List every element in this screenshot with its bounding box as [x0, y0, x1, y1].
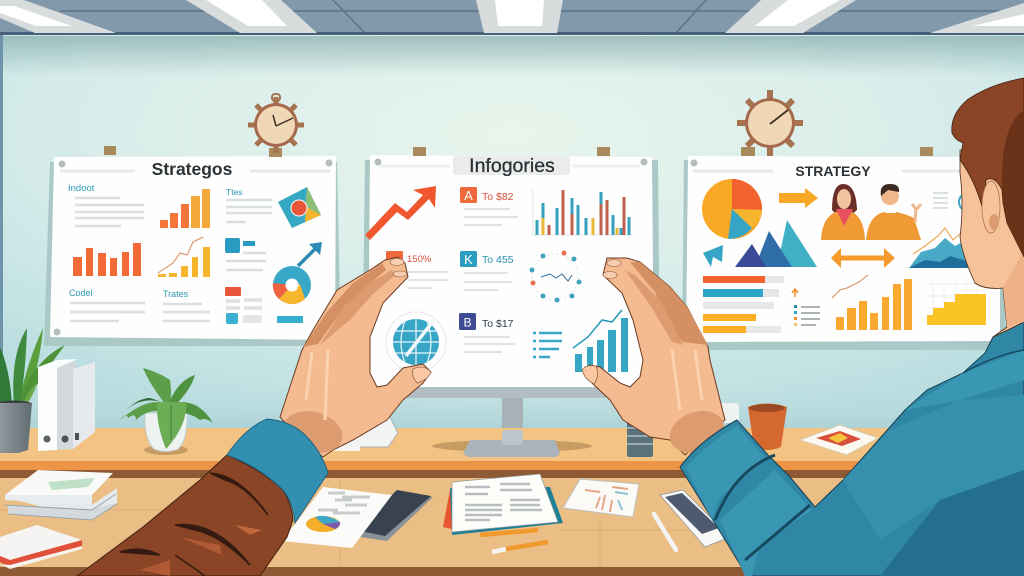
hand	[583, 258, 725, 455]
bar chart: orange flat	[73, 243, 141, 276]
report with pie	[282, 487, 392, 548]
monitor base	[432, 430, 592, 457]
bar chart: gold grid	[927, 284, 986, 325]
brown sleeve	[77, 455, 293, 576]
background wall	[0, 34, 1024, 434]
icon: globe	[386, 312, 446, 372]
bar chart with arrow	[573, 310, 628, 372]
paper stack left	[5, 470, 117, 520]
area chart	[909, 228, 970, 268]
right arm and hand	[582, 258, 1024, 576]
small tags	[225, 287, 303, 324]
man head	[952, 78, 1024, 337]
stat tile A: To $82	[482, 191, 514, 203]
monitor	[400, 388, 614, 442]
wall left edge	[0, 35, 3, 430]
arrow: orange right	[779, 188, 818, 208]
mug white	[718, 403, 739, 423]
clock right	[737, 90, 803, 156]
blue shirt	[680, 322, 1024, 576]
clock left	[248, 94, 304, 153]
heading: Infogories: Infogories	[469, 155, 555, 177]
tablet right	[660, 490, 730, 547]
stat tile K: To 455	[482, 254, 514, 266]
icon: mountains	[735, 220, 817, 267]
stat tile: 150%	[386, 251, 448, 288]
panel: right poster	[682, 147, 1006, 350]
label: Trates: Trates	[163, 289, 189, 299]
pencils	[480, 530, 548, 552]
stat tile A: A	[464, 188, 473, 203]
icon: diamond pie	[278, 187, 321, 228]
stat tile K	[460, 251, 514, 290]
ear	[982, 181, 1000, 233]
pie chart	[702, 179, 762, 239]
stat tile: To $17: To $17	[482, 318, 514, 330]
drinking glass	[627, 420, 653, 457]
plant center	[120, 368, 213, 455]
desk	[0, 428, 1024, 576]
binders	[38, 359, 95, 451]
shirt shading	[686, 350, 1024, 576]
neck and face	[960, 150, 1024, 337]
legend list	[792, 289, 820, 326]
paper stack behind hand	[332, 417, 398, 451]
booklet	[563, 479, 639, 517]
cuff	[227, 419, 328, 523]
arrow: rising red	[365, 186, 436, 240]
tablet dark	[353, 490, 433, 541]
label: Ttes: Ttes	[226, 187, 243, 197]
icon: woman	[821, 184, 865, 240]
horizontal bars	[703, 276, 784, 333]
donut chart	[273, 266, 311, 304]
line and bars chart	[158, 237, 210, 277]
hand	[280, 257, 431, 457]
stat tile: To $17	[459, 313, 515, 352]
bar chart: orange rising	[160, 189, 210, 228]
list icon	[533, 333, 562, 357]
bar chart: multi	[533, 189, 632, 235]
arrow: blue	[298, 242, 322, 266]
label: Codel: Codel	[69, 288, 93, 298]
heading: STRATEGY: STRATEGY	[795, 163, 871, 179]
terracotta pot	[748, 404, 787, 450]
hand shading	[582, 260, 730, 460]
stat tile: 150%: 150%	[407, 254, 432, 265]
stat tile K: K	[464, 252, 473, 267]
icon: man	[866, 184, 921, 240]
network diagram	[530, 250, 582, 302]
bar chart: gold rising	[832, 275, 912, 330]
open book	[443, 474, 563, 535]
small list and ring icon	[933, 193, 977, 211]
arrow: double orange	[831, 248, 895, 268]
hand shading	[279, 258, 431, 459]
text lines	[75, 198, 144, 226]
plant left	[0, 328, 65, 453]
pen	[654, 514, 676, 550]
left arm and hand	[77, 257, 431, 576]
red notebook	[0, 525, 82, 569]
card on desk	[800, 425, 878, 455]
panel: left poster	[44, 146, 341, 346]
icon: small tile	[225, 238, 240, 253]
hair	[952, 78, 1024, 257]
icon: paper plane	[703, 245, 723, 267]
stat tile A	[460, 187, 518, 225]
ceiling	[0, 0, 1024, 35]
stat tile: To $17: B	[463, 316, 472, 330]
heading: Strategos: Strategos	[152, 159, 233, 179]
panel: center poster	[362, 147, 660, 392]
label: Indoot: Indoot	[68, 183, 95, 194]
